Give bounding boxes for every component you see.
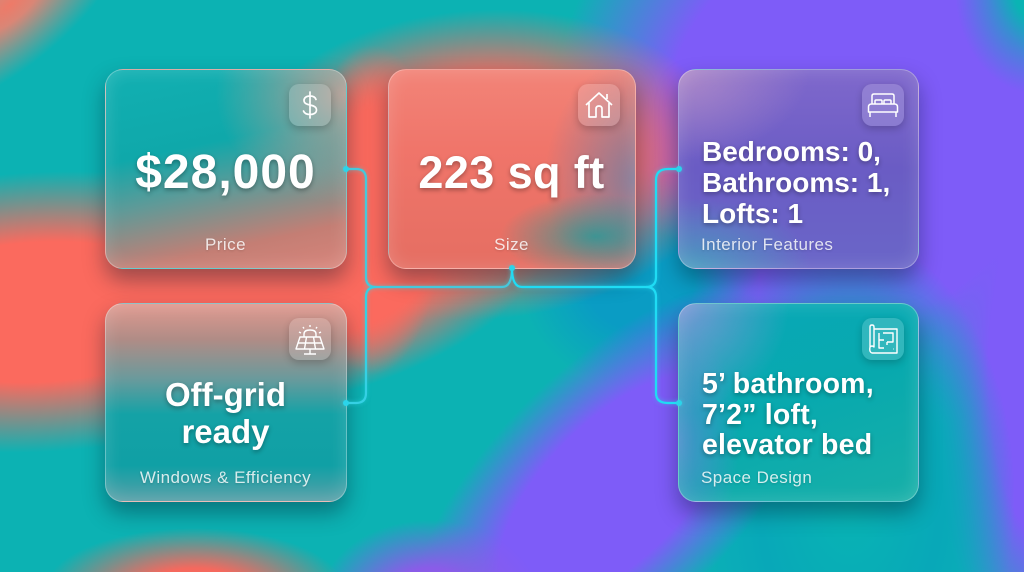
value: off-grid ready <box>164 376 286 454</box>
panel: windows and efficiency <box>105 303 347 502</box>
label: space design: Space Design <box>701 468 812 487</box>
label: windows and efficiency: Windows & Efficiency <box>140 468 311 487</box>
label: interior features: Interior Features <box>701 235 833 254</box>
icon: floor plan <box>862 318 904 360</box>
value: interior features: Bathrooms: 1, <box>702 167 890 198</box>
value: size: 223 sq ft <box>418 147 605 198</box>
value: interior features: Lofts: 1 <box>702 198 803 229</box>
value: space design: elevator bed <box>702 429 872 461</box>
value: space design: 5’ bathroom, <box>702 368 874 400</box>
value: off-grid ready: ready <box>181 413 270 450</box>
panel: price <box>105 69 347 269</box>
icon: bed <box>862 84 904 126</box>
icon: dollar <box>289 84 331 126</box>
value: space design <box>701 368 874 461</box>
panel: size <box>388 69 636 269</box>
panel: interior features <box>678 69 919 269</box>
icon: house <box>578 84 620 126</box>
icon: solar panel <box>289 318 331 360</box>
panel: space design <box>678 303 919 502</box>
value: price: $28,000 <box>135 146 316 199</box>
value: interior features <box>702 136 890 229</box>
value: off-grid ready: Off-grid <box>165 376 286 413</box>
label: price: Price <box>205 235 246 254</box>
label: size: Size <box>494 235 529 254</box>
value: interior features: Bedrooms: 0, <box>702 136 881 167</box>
value: space design: 7’2” loft, <box>702 398 818 430</box>
